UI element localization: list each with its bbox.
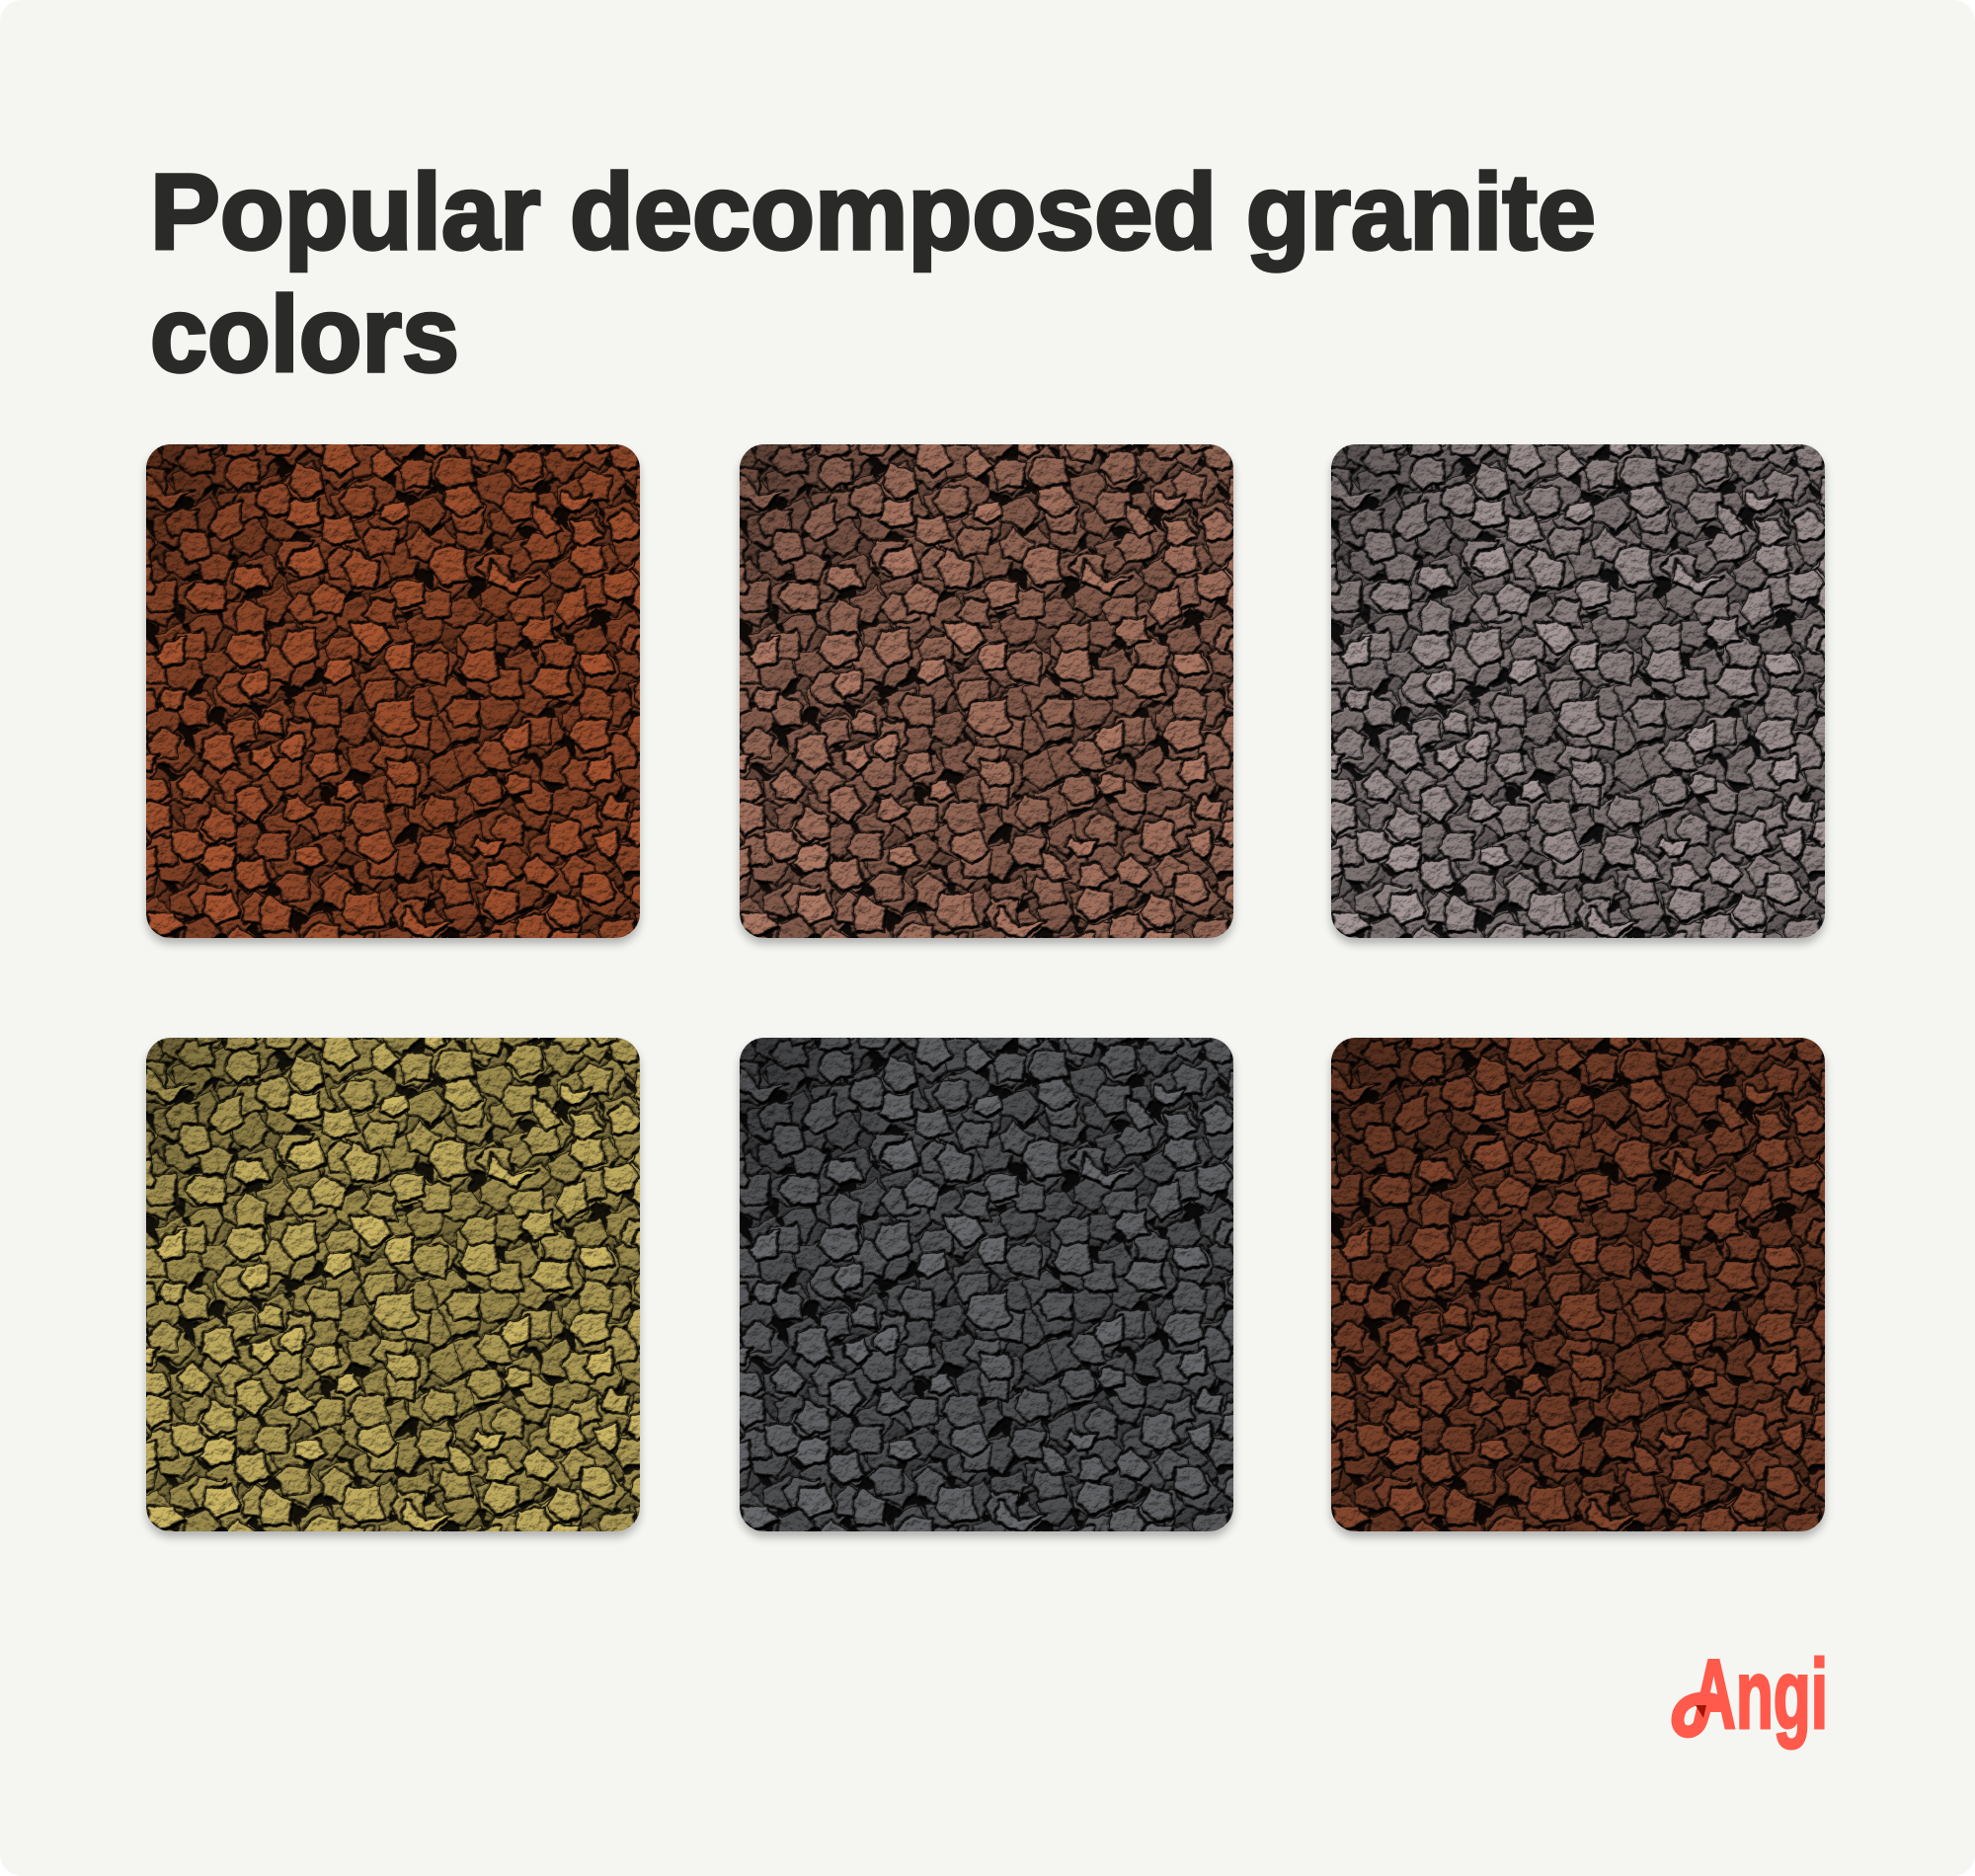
title: Popular decomposed granite	[150, 152, 1596, 273]
swatch: rust red granite	[146, 444, 640, 938]
swatch: charcoal granite	[740, 1038, 1233, 1531]
swatch: golden tan granite	[146, 1038, 640, 1531]
swatch: mauve gray granite	[1331, 444, 1825, 938]
title	[150, 152, 1596, 395]
swatch: dark brown granite	[1331, 1038, 1825, 1531]
swatch: light brown granite	[740, 444, 1233, 938]
title: colors	[150, 274, 459, 395]
